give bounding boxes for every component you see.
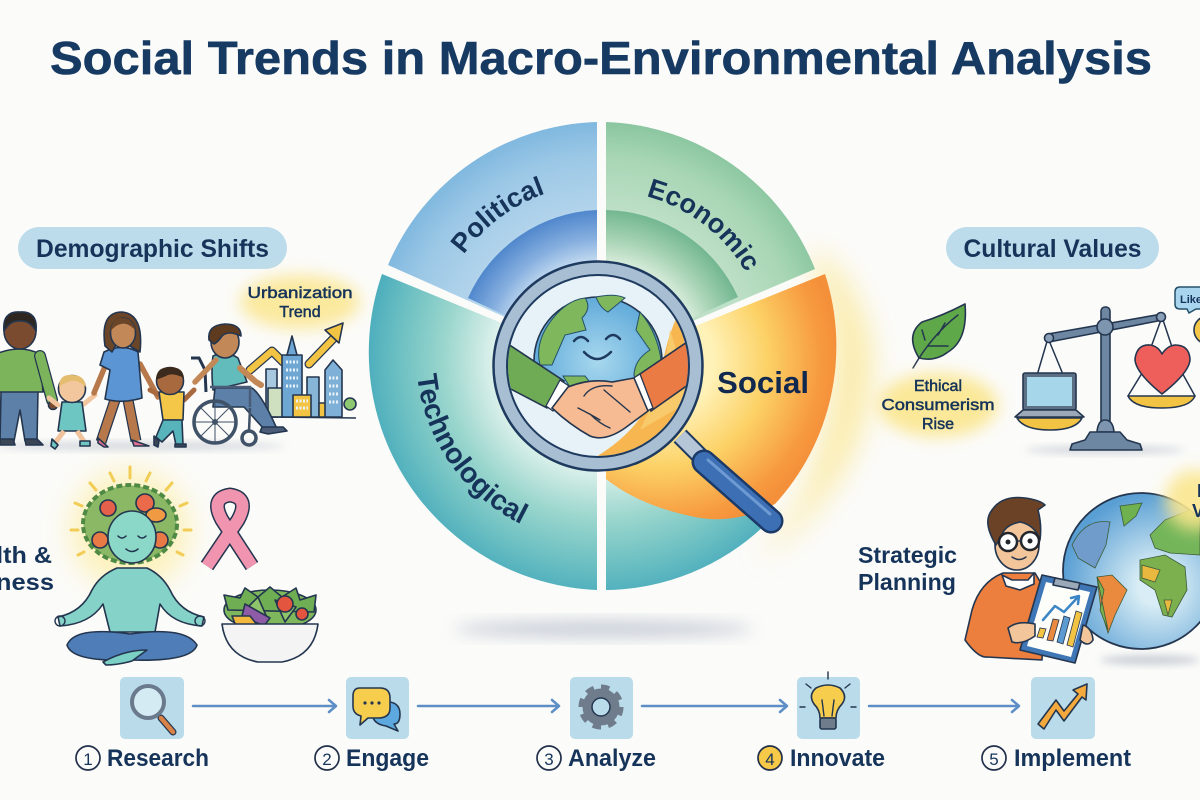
callout: Urbanization Trend: Urbanization <box>248 285 352 302</box>
icon: leaf <box>913 304 965 368</box>
circled number 1: 1 <box>83 750 93 769</box>
icon: gear <box>582 688 620 726</box>
globe in lens <box>533 294 663 386</box>
icon: pink ribbon <box>207 495 252 566</box>
heading: Strategic Planning <box>858 542 957 595</box>
icon: magnifier <box>132 686 173 732</box>
magnifying glass <box>494 262 771 521</box>
heading: Strategic Planning: Planning <box>858 569 956 595</box>
step 5: Implement: Implement <box>1014 745 1131 772</box>
wheel ground shadow <box>453 621 753 637</box>
person: woman <box>94 312 158 447</box>
segment: Economic: Economic <box>648 178 756 270</box>
person: child <box>150 367 194 447</box>
circled number 4: 4 <box>765 750 775 769</box>
step 2: Engage <box>315 677 429 772</box>
person: man <box>0 312 58 445</box>
global map <box>1063 493 1200 665</box>
people ground shadow <box>0 442 285 450</box>
panel: process steps <box>76 672 1131 772</box>
step 1: Research <box>76 677 209 772</box>
callout: Key Values <box>1165 470 1200 530</box>
step 4: Innovate <box>758 672 885 772</box>
like bubble <box>1175 287 1200 344</box>
step 5: Implement <box>982 677 1131 772</box>
person: wheelchair user <box>191 324 287 445</box>
pill heading: Cultural Values <box>946 227 1159 269</box>
arrow 4 <box>869 700 1019 712</box>
heading: Health & Wellness <box>0 542 54 595</box>
title: Social Trends in Macro-Environmental Analysis <box>50 32 1152 84</box>
segment: Social <box>606 274 836 519</box>
callout: Ethical Consumerism Rise: Consumerism <box>882 397 994 414</box>
wellness glow <box>70 470 190 590</box>
social glow <box>760 250 872 560</box>
circled number 5: 5 <box>989 750 999 769</box>
pill heading: Demographic Shifts <box>18 227 287 269</box>
step 4: Innovate: Innovate <box>790 745 885 772</box>
meditating figure <box>55 485 205 665</box>
laptop on pan <box>1015 373 1084 430</box>
panel: PEST wheel <box>368 122 913 645</box>
pill heading: Demographic Shifts: Demographic Shifts <box>36 235 269 263</box>
segment: Technological: Technological <box>418 372 529 524</box>
step 1: Research: Research <box>107 745 209 772</box>
handshake <box>552 378 648 438</box>
panel: demographic shifts <box>0 227 360 450</box>
circled number 5 <box>982 746 1006 770</box>
green sleeve <box>503 342 564 408</box>
callout: Urbanization Trend: Trend <box>279 304 321 321</box>
segment: Political <box>388 122 597 317</box>
person with clipboard <box>965 498 1097 663</box>
clipboard chart <box>1020 575 1097 663</box>
person: toddler <box>49 375 95 449</box>
panel: cultural values <box>878 227 1200 454</box>
circled number 3: 3 <box>544 750 554 769</box>
icon: salad bowl <box>222 587 318 662</box>
panel: health and wellness <box>0 467 318 665</box>
circled number 2: 2 <box>322 750 332 769</box>
pill heading: Cultural Values: Cultural Values <box>964 235 1142 263</box>
segment: Technological <box>368 274 761 590</box>
callout: Ethical Consumerism Rise: Ethical <box>914 378 962 395</box>
icon: growth arrow <box>1038 684 1087 729</box>
step 3: Analyze <box>537 677 656 772</box>
scale of values <box>1015 287 1200 454</box>
rays <box>71 467 191 555</box>
step 2: Engage: Engage <box>346 745 429 772</box>
icon: light bulb <box>800 672 856 729</box>
segment: Political: Political <box>450 176 544 254</box>
icon: chat bubbles <box>353 688 400 731</box>
globe face <box>574 335 620 359</box>
city skyline with trend arrow <box>250 323 356 418</box>
panel: strategic planning <box>858 470 1200 665</box>
callout: Urbanization Trend <box>240 275 360 329</box>
arrow 3 <box>642 700 787 712</box>
callout: Ethical Consumerism Rise <box>878 373 998 437</box>
arrow 2 <box>418 700 559 712</box>
hands <box>1008 623 1035 643</box>
heading: Strategic Planning: Strategic <box>858 542 957 568</box>
step 3: Analyze: Analyze <box>568 745 656 772</box>
arrow 1 <box>193 700 336 712</box>
cuffs <box>546 380 569 411</box>
orange sleeve <box>636 342 688 412</box>
segment: Economic <box>606 122 815 321</box>
heart on pan <box>1128 345 1195 408</box>
segment: Social: Social <box>717 365 809 400</box>
callout: Ethical Consumerism Rise: Rise <box>922 416 954 433</box>
